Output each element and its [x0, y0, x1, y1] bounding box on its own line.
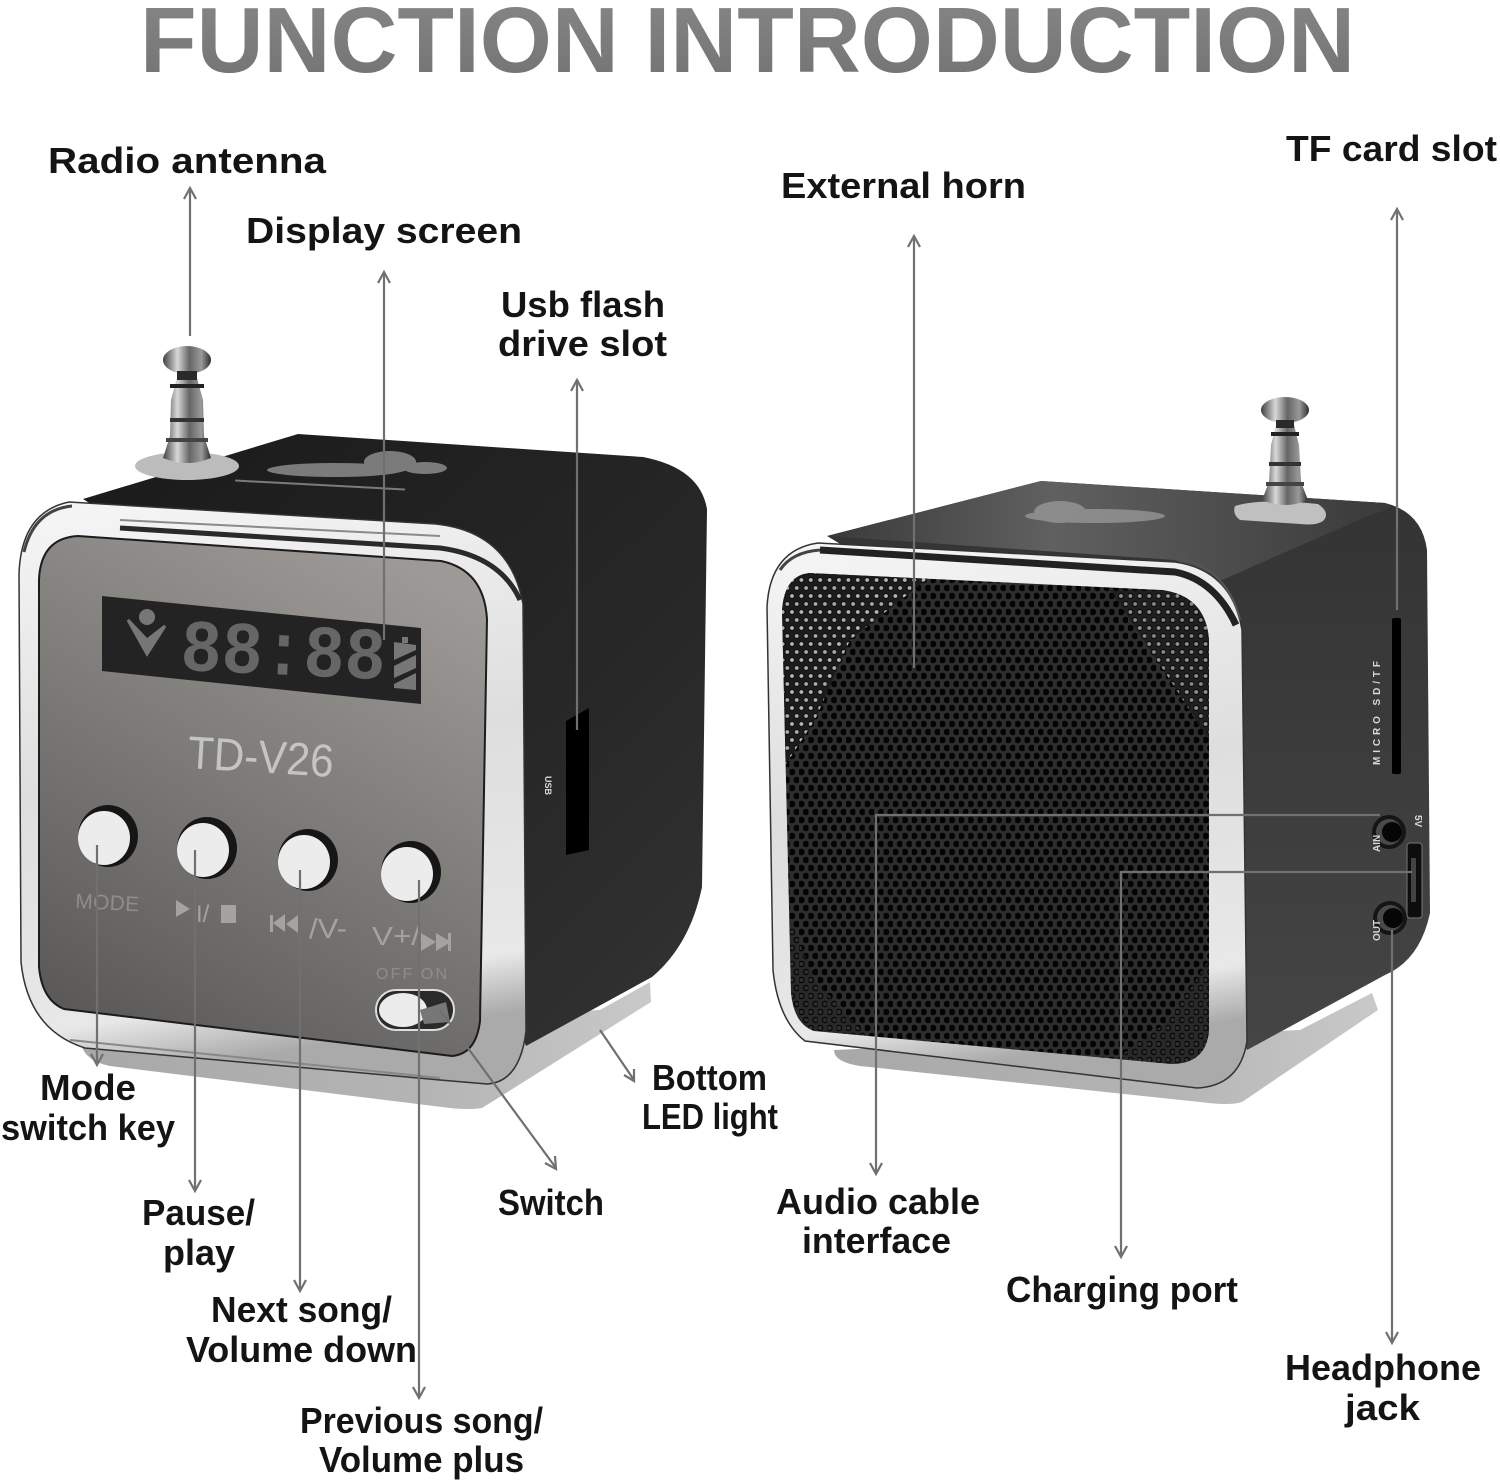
port labels: 5V: [1412, 815, 1423, 828]
top face: [827, 481, 1390, 580]
arrow: audio cable interface: [870, 815, 1380, 1174]
usb charging port: [1407, 843, 1422, 918]
label: usb flash drive slot: Usb flash: [501, 284, 665, 325]
slide switch: [376, 990, 454, 1030]
label: mode switch key: switch key: [1, 1107, 175, 1148]
logo mark: [128, 620, 165, 654]
arrow: display screen: [378, 272, 390, 640]
arrow: charging port: [1115, 872, 1412, 1257]
label: tf card slot: TF card slot: [1286, 128, 1497, 169]
button labels: OFF ON: [376, 966, 447, 983]
label: previous song volume plus: Volume plus: [319, 1439, 524, 1480]
label: bottom led light: Bottom: [652, 1057, 767, 1098]
label: usb flash drive slot: [498, 284, 667, 364]
label: next song volume down: Next song/: [211, 1289, 392, 1330]
button labels: V+/: [372, 921, 421, 951]
label: switch: Switch: [498, 1182, 604, 1223]
port labels: [1372, 815, 1423, 941]
arrow: tf card slot: [1391, 209, 1403, 610]
arrow: headphone jack: [1386, 930, 1398, 1343]
front panel: [39, 536, 487, 1056]
label: external horn: External horn: [781, 165, 1026, 206]
label: charging port: Charging port: [1006, 1269, 1238, 1310]
arrow: previous song: [413, 880, 425, 1398]
label: pause play: Pause/: [142, 1192, 255, 1233]
top logo marking: [235, 451, 447, 490]
arrow: mode switch key: [91, 845, 103, 1065]
label: mode switch key: Mode: [40, 1067, 136, 1108]
aux jack: [1372, 815, 1406, 849]
out jack: [1373, 901, 1407, 935]
tf card slot: [1392, 618, 1401, 774]
arrow: next song: [294, 870, 306, 1291]
bezel highlights: [24, 506, 520, 1078]
speaker body: [827, 481, 1430, 1050]
chrome bezel: [19, 502, 526, 1084]
usb text: USB: [543, 776, 553, 796]
arrow: switch: [440, 1010, 556, 1169]
label: mode switch key: [1, 1067, 175, 1148]
button labels: [75, 890, 451, 983]
label: previous song volume plus: [300, 1400, 543, 1480]
button labels: I/: [196, 901, 210, 928]
arrow: external horn: [908, 236, 920, 668]
label: bottom led light: [642, 1057, 778, 1137]
label: pause play: [142, 1192, 255, 1273]
base LED light: [834, 993, 1378, 1104]
top logo marking: [1025, 501, 1165, 523]
label: usb flash drive slot: drive slot: [498, 323, 667, 364]
antenna: [135, 346, 239, 480]
antenna: [1234, 397, 1326, 524]
bezel highlights: [780, 550, 1240, 625]
button labels: /V-: [309, 913, 347, 944]
label: previous song volume plus: Previous song/: [300, 1400, 543, 1441]
arrow: usb flash drive slot: [571, 380, 583, 730]
label: audio cable interface: Audio cable: [776, 1181, 980, 1222]
usb slot: [566, 708, 589, 855]
label: next song volume down: [186, 1289, 417, 1370]
left speaker: front with display and buttons: [19, 346, 707, 1109]
label: headphone jack: jack: [1344, 1387, 1421, 1428]
port labels: AIN: [1372, 835, 1383, 852]
chrome bezel: [767, 543, 1247, 1088]
micro sd text: MICRO SD/TF: [1372, 661, 1383, 765]
label: headphone jack: Headphone: [1285, 1347, 1481, 1388]
speaker grille: [775, 565, 1215, 1070]
battery: [394, 642, 416, 690]
label: next song volume down: Volume down: [186, 1329, 417, 1370]
port labels: OUT: [1372, 920, 1383, 941]
label: bottom led light: LED light: [642, 1096, 778, 1137]
right speaker: rear grille and ports: [767, 397, 1430, 1104]
label: audio cable interface: interface: [802, 1220, 951, 1261]
button labels: MODE: [75, 890, 140, 916]
label: headphone jack: [1285, 1347, 1481, 1428]
arrow: bottom led light: [600, 1030, 634, 1081]
digits: 88:88: [179, 609, 387, 702]
buttons: [78, 805, 441, 903]
arrow: radio antenna: [184, 188, 196, 336]
label: pause play: play: [163, 1232, 235, 1273]
label: display screen: Display screen: [246, 210, 522, 251]
display screen: [102, 596, 421, 704]
model text: TD-V26: [186, 726, 335, 787]
base LED light: [80, 982, 651, 1109]
arrow: pause play: [189, 850, 201, 1191]
label: audio cable interface: [776, 1181, 980, 1261]
speaker body: [83, 434, 707, 1046]
label: radio antenna: Radio antenna: [48, 140, 327, 181]
